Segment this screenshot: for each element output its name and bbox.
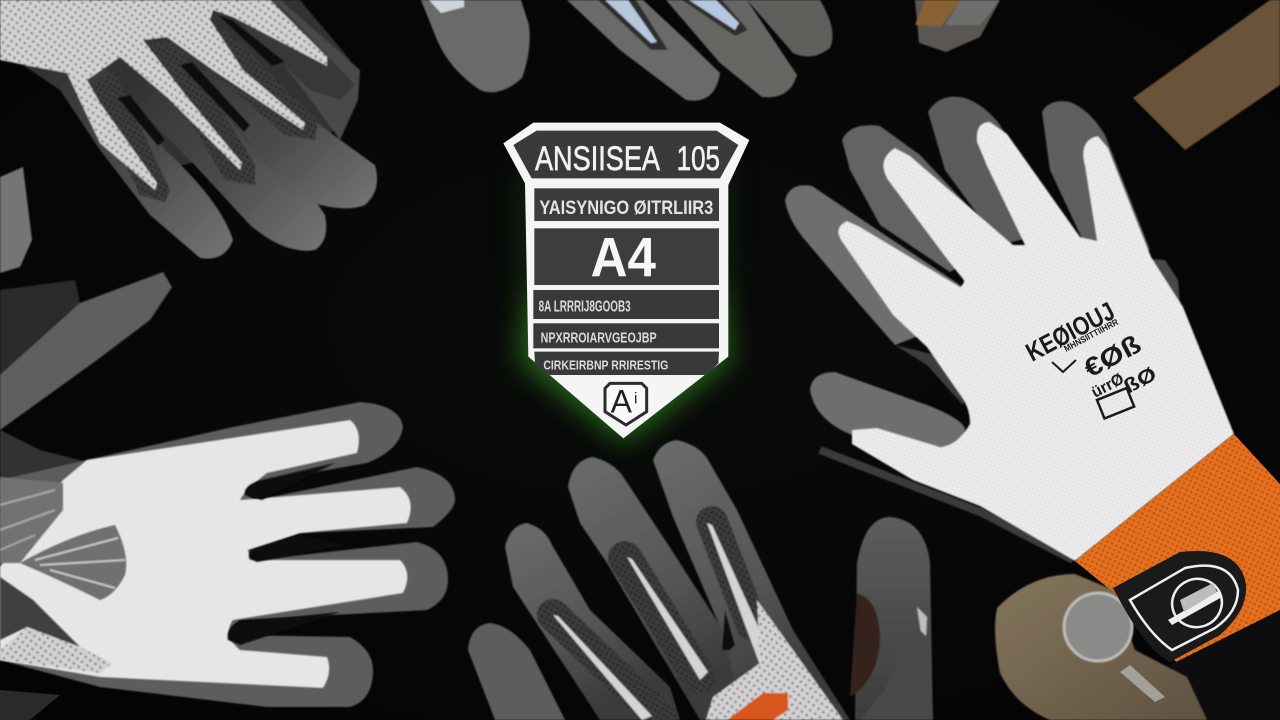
rating row: subtitle: YAISYNIGO ØITRLIIR3 <box>539 198 714 219</box>
icon: A mark: i <box>634 390 637 407</box>
mesh strips <box>553 615 652 720</box>
shield header: ANSI ISEA 105 <box>513 131 738 178</box>
shield badge: ANSI/ISEA A4 <box>503 123 749 438</box>
rating row: subtitle <box>534 188 719 221</box>
printed rating label: ürrØ <box>1089 371 1127 402</box>
leaf pattern on palm <box>0 477 126 673</box>
glove: bottom centre thumb <box>850 517 933 720</box>
dark glove beneath <box>0 690 60 720</box>
hammer fragment, top <box>915 0 1000 52</box>
icon: A mark: A <box>611 384 633 420</box>
shield header: ANSI ISEA 105: 105 <box>677 140 720 178</box>
under edge shadow <box>820 450 1073 560</box>
wooden ruler, top right <box>1133 0 1280 150</box>
glove: right, white with grey coating and orange cuff <box>785 97 1280 720</box>
printed rating label: €Øß <box>1079 329 1146 383</box>
green glow behind shield <box>520 170 730 442</box>
detail row 1: 8A LRRRIJ8GOOB3 <box>539 299 631 316</box>
grey coating <box>0 402 455 707</box>
printed rating label: MHNSIITTIIHRR <box>1062 317 1120 354</box>
printed rating label: KEØIOUJ <box>1021 296 1120 367</box>
finger gaps <box>228 463 345 645</box>
dark stitched inserts <box>553 615 660 717</box>
detail row 1 <box>533 290 719 319</box>
black wristband <box>1170 610 1280 720</box>
icon: A mark <box>605 383 647 425</box>
detail row 3: CIRKEIRBNP RRIRESTIG <box>543 358 668 373</box>
glove: top centre, grey fingertips <box>421 0 832 101</box>
glove: bottom left, white palm with grey coating <box>0 402 455 720</box>
white palm <box>0 420 411 688</box>
metal tool: tan disc and bolt, bottom right <box>995 574 1207 720</box>
glove: left edge fragment <box>0 167 32 273</box>
rating row: A4 <box>534 226 719 289</box>
wrist badge with logo <box>1113 551 1246 662</box>
shield header: ANSI ISEA 105: ANSIISEA <box>535 140 661 178</box>
orange cuff <box>1075 434 1280 666</box>
stitched dark bands <box>88 72 170 202</box>
mesh palm <box>706 600 843 720</box>
bolt <box>1064 593 1132 661</box>
mesh yoke and strips <box>0 0 327 190</box>
hand base behind the fingers <box>60 0 350 170</box>
slot shadows <box>722 610 735 650</box>
rating row: A4: A4 <box>591 226 656 289</box>
fingers <box>468 623 565 720</box>
detail row 3 <box>534 352 719 375</box>
printed rating label: ßØ <box>1120 363 1160 398</box>
detail row 2: NPXRROIARVGEOJBP <box>541 331 657 347</box>
black slots <box>118 95 165 146</box>
glove: bottom centre, grey with mesh <box>468 440 850 720</box>
printed rating label <box>1021 296 1160 419</box>
detail row 2 <box>533 323 719 348</box>
white palm and fingers <box>838 122 1234 561</box>
glove: left, dark grey with pale finger <box>0 272 172 480</box>
fingertips <box>20 60 233 259</box>
orange patch <box>727 693 788 720</box>
glove: top left, grey with mesh inserts <box>0 0 377 259</box>
shield outline <box>503 123 749 438</box>
grey finger coating <box>785 97 1180 448</box>
